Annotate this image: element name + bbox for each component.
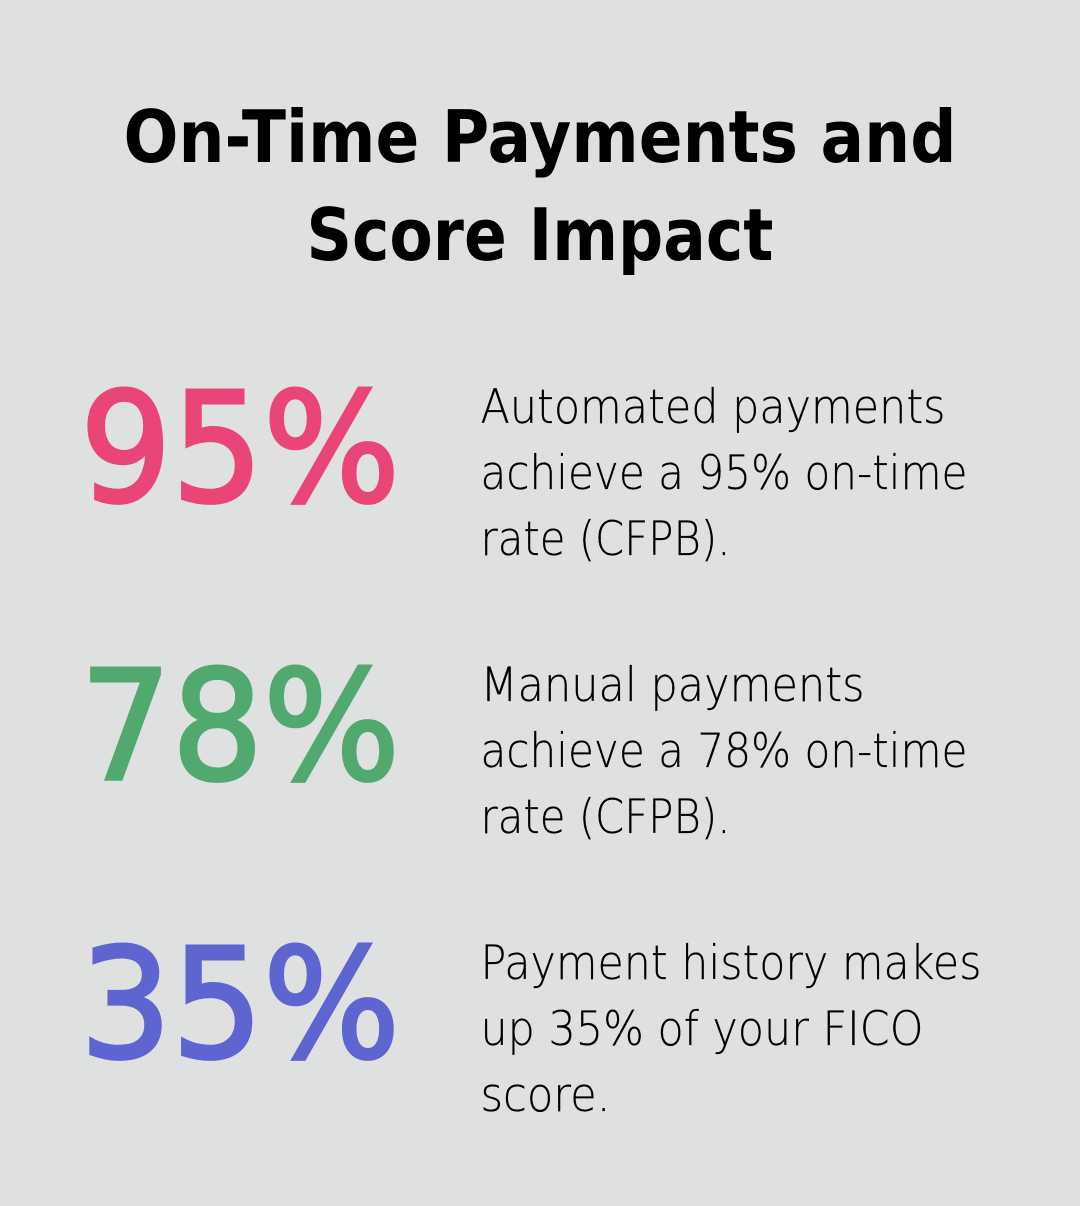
description: manual payments: achieve a 78% on-time [480, 724, 968, 779]
panel: payment history stat [80, 916, 982, 1123]
description: payment history: score. [480, 1068, 610, 1123]
description: payment history: Payment history makes [480, 936, 982, 991]
stat: 35%: 35% [80, 916, 400, 1093]
description: automated payments: achieve a 95% on-time [480, 446, 968, 501]
panel: automated payments stat [80, 360, 968, 567]
description: automated payments: rate (CFPB). [480, 512, 730, 567]
stat: 95%: 95% [80, 360, 400, 537]
description: manual payments: rate (CFPB). [480, 790, 730, 845]
panel: manual payments stat [80, 638, 968, 845]
stat: 78%: 78% [80, 638, 400, 815]
title [124, 95, 956, 277]
description: manual payments: Manual payments [480, 658, 864, 713]
description: automated payments [480, 380, 968, 567]
title: On-Time Payments and [124, 95, 956, 179]
description: manual payments [480, 658, 968, 845]
description: payment history: up 35% of your FICO [480, 1002, 924, 1057]
title: Score Impact [306, 193, 774, 277]
description: payment history [480, 936, 982, 1123]
description: automated payments: Automated payments [480, 380, 946, 435]
